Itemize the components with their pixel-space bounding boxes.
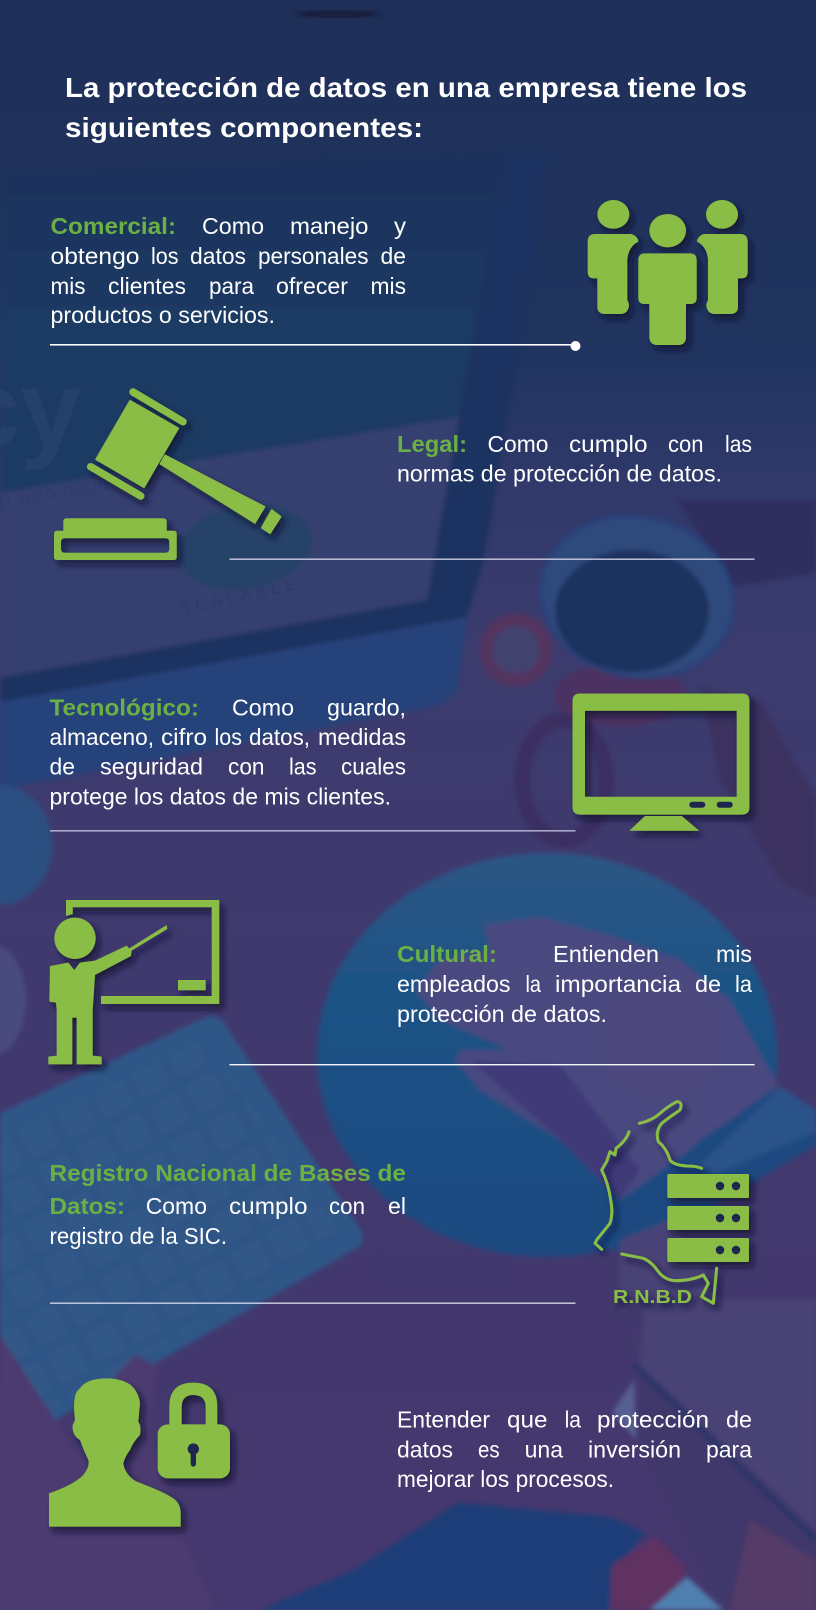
tecnológico text: medidas xyxy=(318,724,406,750)
cultural text: Entienden xyxy=(553,941,659,967)
registro text: Datos: xyxy=(50,1193,125,1219)
legal text: cumplo xyxy=(569,431,648,457)
padlock xyxy=(158,1383,230,1478)
registro text: Como xyxy=(146,1193,207,1219)
map outline xyxy=(595,1102,717,1303)
comercial text: obtengo xyxy=(50,243,140,269)
cultural text: importancia xyxy=(555,971,681,997)
mug handle shadow xyxy=(522,720,606,840)
cultural text: Cultural: xyxy=(397,941,497,967)
laptop base xyxy=(0,617,467,790)
tecnológico text: los xyxy=(214,724,242,750)
comercial text: Como xyxy=(202,213,264,239)
divider xyxy=(230,558,754,560)
mug handle xyxy=(486,620,546,680)
light blue cloth xyxy=(650,1577,723,1610)
comercial text: ofrecer xyxy=(276,273,348,299)
comercial text: personales xyxy=(258,243,368,269)
tecnológico text: cifro xyxy=(161,724,207,750)
left hand xyxy=(0,1335,215,1610)
panel: inversión xyxy=(49,1378,752,1527)
cultural text: de xyxy=(695,971,721,997)
inversión text: protección xyxy=(597,1406,709,1432)
icon: person with padlock xyxy=(49,1378,230,1527)
inversión text xyxy=(397,1406,752,1492)
divider xyxy=(230,1064,754,1065)
registro text: Registro Nacional de Bases de xyxy=(50,1160,406,1186)
comercial text: clientes xyxy=(108,273,186,299)
comercial text xyxy=(50,213,407,328)
right arm xyxy=(640,1300,816,1530)
cultural text: la xyxy=(526,971,541,997)
big mouse xyxy=(317,853,777,1257)
legal text xyxy=(397,431,752,486)
panel: legal xyxy=(54,392,754,560)
inversión text: datos xyxy=(397,1436,453,1462)
laptop screen upper xyxy=(0,150,506,680)
legal text: Legal: xyxy=(397,431,467,457)
tecnológico text: Tecnológico: xyxy=(50,694,199,720)
legal text: las xyxy=(725,431,752,457)
divider with dot xyxy=(50,341,580,351)
cultural text: mis xyxy=(716,941,752,967)
divider xyxy=(50,1302,576,1304)
comercial text: mis xyxy=(370,273,406,299)
title: La protección de datos en una empresa tiene los xyxy=(65,72,747,103)
servers xyxy=(667,1174,749,1262)
inversión text: Entender xyxy=(397,1406,490,1432)
comercial text: y xyxy=(394,213,407,239)
title: siguientes componentes: xyxy=(65,112,423,143)
icon: teacher at board xyxy=(48,900,219,1064)
panel: registro nacional xyxy=(50,1102,749,1307)
right dark areas xyxy=(677,500,816,587)
tecnológico text: cuales xyxy=(341,754,406,780)
title xyxy=(65,72,747,143)
registro text: cumplo xyxy=(229,1193,308,1219)
inversión text: para xyxy=(706,1436,752,1462)
R.N.B.D label: R.N.B.D xyxy=(613,1287,692,1307)
laptop bezel xyxy=(0,150,551,702)
laptop screen lighter xyxy=(0,415,470,678)
cultural text xyxy=(397,941,752,1027)
cultural text: protección de datos. xyxy=(397,1001,607,1027)
tecnológico text xyxy=(50,694,406,810)
icon: gavel xyxy=(54,392,281,560)
hand over mouse xyxy=(415,917,778,1200)
registro text: registro de la SIC. xyxy=(50,1223,227,1249)
inversión text: que xyxy=(507,1406,548,1432)
tecnológico text: almaceno, xyxy=(50,724,154,750)
tecnológico text: con xyxy=(228,754,264,780)
inversión text: una xyxy=(525,1436,563,1462)
registro text xyxy=(50,1160,406,1249)
divider xyxy=(50,830,576,832)
inversión text: la xyxy=(565,1406,581,1432)
inversión text: mejorar los procesos. xyxy=(397,1466,614,1492)
icon: Colombia map with servers xyxy=(595,1102,749,1307)
keyboard xyxy=(0,1015,362,1440)
tecnológico text: datos, xyxy=(249,724,310,750)
comercial text: manejo xyxy=(290,213,368,239)
inversión text: inversión xyxy=(588,1436,681,1462)
legal text: con xyxy=(668,431,704,457)
cultural text: empleados xyxy=(397,971,510,997)
tecnológico text: guardo, xyxy=(327,694,406,720)
comercial text: Comercial: xyxy=(50,213,176,239)
inversión text: de xyxy=(726,1406,752,1432)
legal text: Como xyxy=(488,431,548,457)
faint screen lettering xyxy=(0,348,297,618)
faint screen lettering: n web page xyxy=(0,472,111,513)
tecnológico text: protege los datos de mis clientes. xyxy=(50,784,391,810)
comercial text: datos xyxy=(190,243,246,269)
cultural text: la xyxy=(735,971,752,997)
tecnológico text: Como xyxy=(232,694,294,720)
pink cloth xyxy=(610,1537,688,1610)
tecnológico text: de xyxy=(50,754,75,780)
coffee mug xyxy=(525,499,749,695)
comercial text: para xyxy=(209,273,254,299)
legal text: normas de protección de datos. xyxy=(397,460,722,486)
panel: cultural xyxy=(48,900,755,1065)
registro text: con xyxy=(329,1193,365,1219)
icon: monitor xyxy=(572,694,750,831)
panel: tecnológico xyxy=(50,694,750,832)
inversión text: es xyxy=(478,1436,500,1462)
dark smudge top xyxy=(296,10,380,18)
icon: people xyxy=(588,200,748,345)
tecnológico text: las xyxy=(289,754,316,780)
comercial text: mis xyxy=(50,273,86,299)
comercial text: de xyxy=(380,243,406,269)
lower hand xyxy=(620,1220,720,1310)
faint screen lettering: SCALABLE xyxy=(178,577,297,618)
registro text: el xyxy=(388,1193,406,1219)
comercial text: productos o servicios. xyxy=(50,302,275,328)
sweater xyxy=(260,1503,650,1610)
panel: comercial xyxy=(50,200,748,351)
wrist band xyxy=(605,1087,816,1250)
comercial text: los xyxy=(151,243,178,269)
tecnológico text: seguridad xyxy=(100,754,203,780)
